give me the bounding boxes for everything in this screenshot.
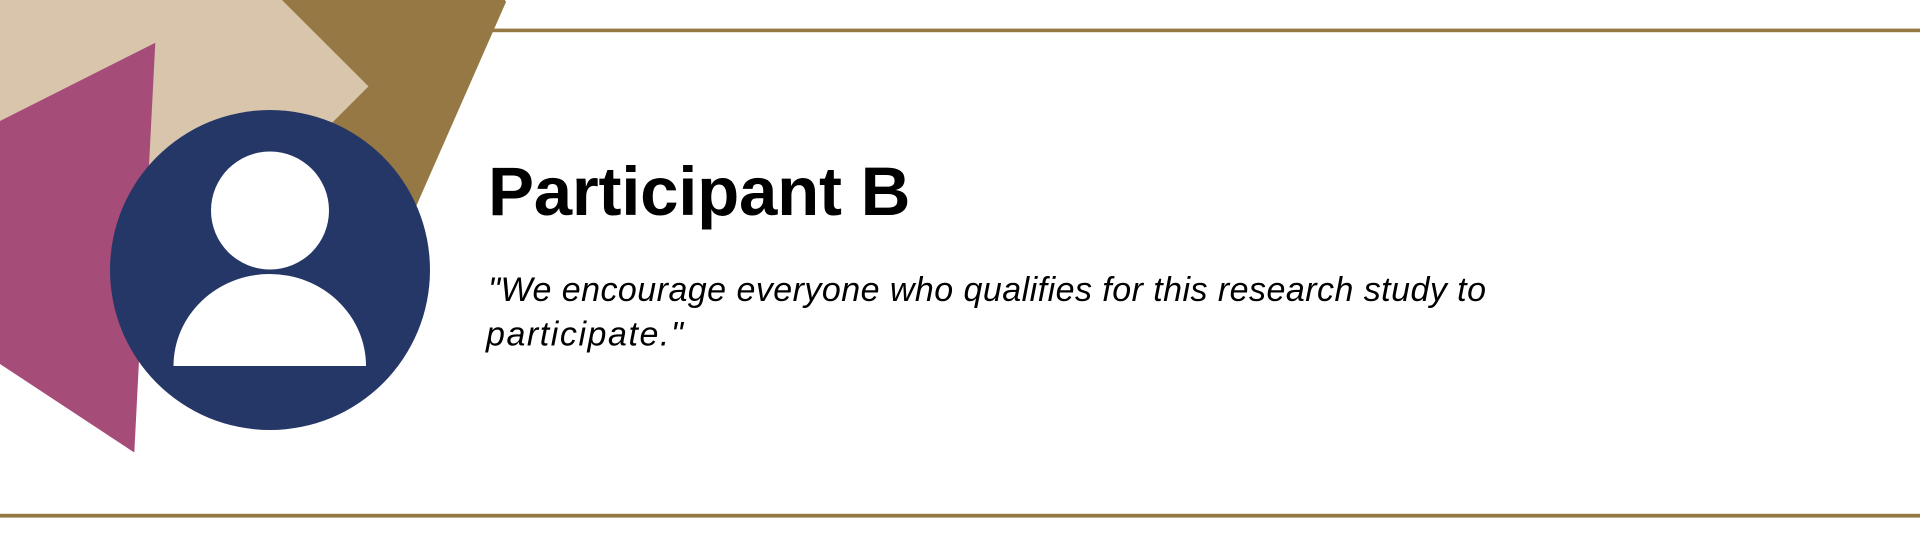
decorative shape: beige polygon: [0, 0, 368, 205]
quote line 2: participate.": [485, 316, 685, 354]
icon: person shoulders: [174, 274, 366, 366]
decorative shape: magenta polygon: [0, 43, 155, 452]
heading: Participant B: [488, 153, 910, 230]
quote line 1: "We encourage everyone who qualifies for this research study to: [488, 271, 1486, 309]
icon: person head: [211, 152, 329, 270]
avatar badge: [110, 110, 430, 430]
quote text: [485, 271, 1486, 354]
decorative shape: brown triangle: [200, 0, 506, 243]
top gold rule: [480, 29, 1920, 32]
avatar circle: [110, 110, 430, 430]
bottom gold rule: [0, 514, 1920, 518]
